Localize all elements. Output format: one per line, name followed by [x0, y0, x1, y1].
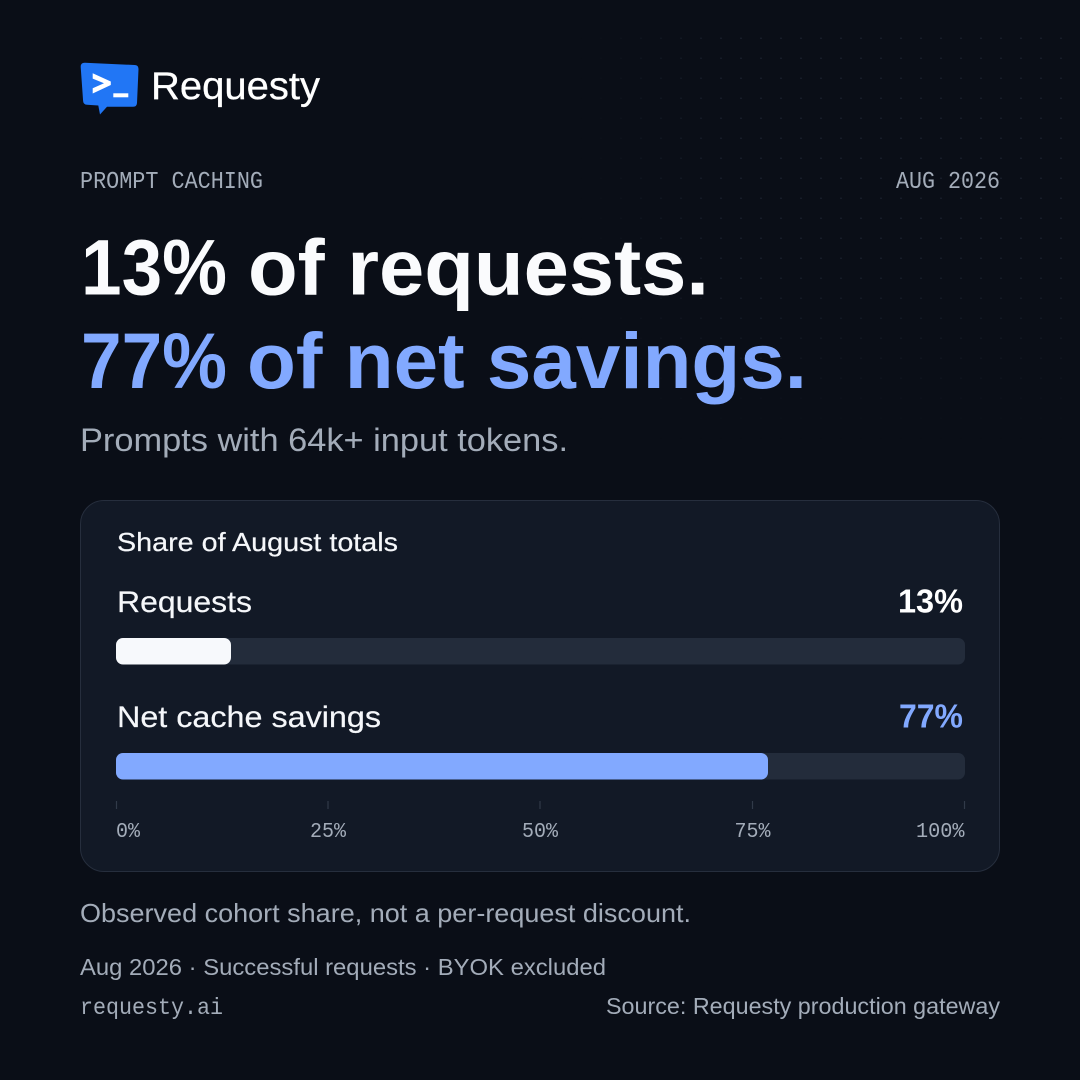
- subtitle: Prompts with 64k+ input tokens.: [80, 422, 568, 458]
- row: net cache savings: [116, 698, 965, 780]
- axis: 75%: [734, 820, 771, 844]
- eyebrow: prompt caching: PROMPT CACHING: [80, 169, 263, 196]
- icon: terminal speech bubble: [81, 63, 139, 114]
- axis: 0%: [116, 820, 140, 844]
- headline line 1: 13%: [81, 222, 227, 312]
- row: requests: [116, 582, 965, 664]
- row: net cache savings: Net cache savings: [117, 701, 381, 734]
- row: net cache savings: 77%: [899, 698, 963, 734]
- source: Source: Requesty production gateway: [606, 993, 1000, 1019]
- row: requests: Requests: [117, 586, 252, 619]
- site url: requesty.ai: [80, 995, 223, 1021]
- row: requests: 13%: [898, 582, 963, 620]
- axis: [116, 801, 965, 844]
- note: Observed cohort share, not a per-request discount.: [80, 898, 691, 928]
- panel heading: Share of August totals: [117, 527, 398, 557]
- methodology: Aug 2026 · Successful requests · BYOK excluded: [80, 954, 606, 980]
- title: [81, 222, 807, 405]
- headline line 2: of net savings.: [247, 316, 807, 405]
- date: AUG 2026: [896, 169, 1000, 196]
- axis: 25%: [310, 820, 346, 844]
- axis: 100%: [916, 820, 965, 844]
- logo: Requesty: [81, 63, 321, 114]
- headline line 2: 77%: [81, 316, 227, 405]
- axis: 50%: [522, 820, 558, 844]
- headline line 1: of requests.: [248, 222, 709, 312]
- wordmark: Requesty: [151, 65, 321, 108]
- panel: share of August totals: [80, 500, 1000, 872]
